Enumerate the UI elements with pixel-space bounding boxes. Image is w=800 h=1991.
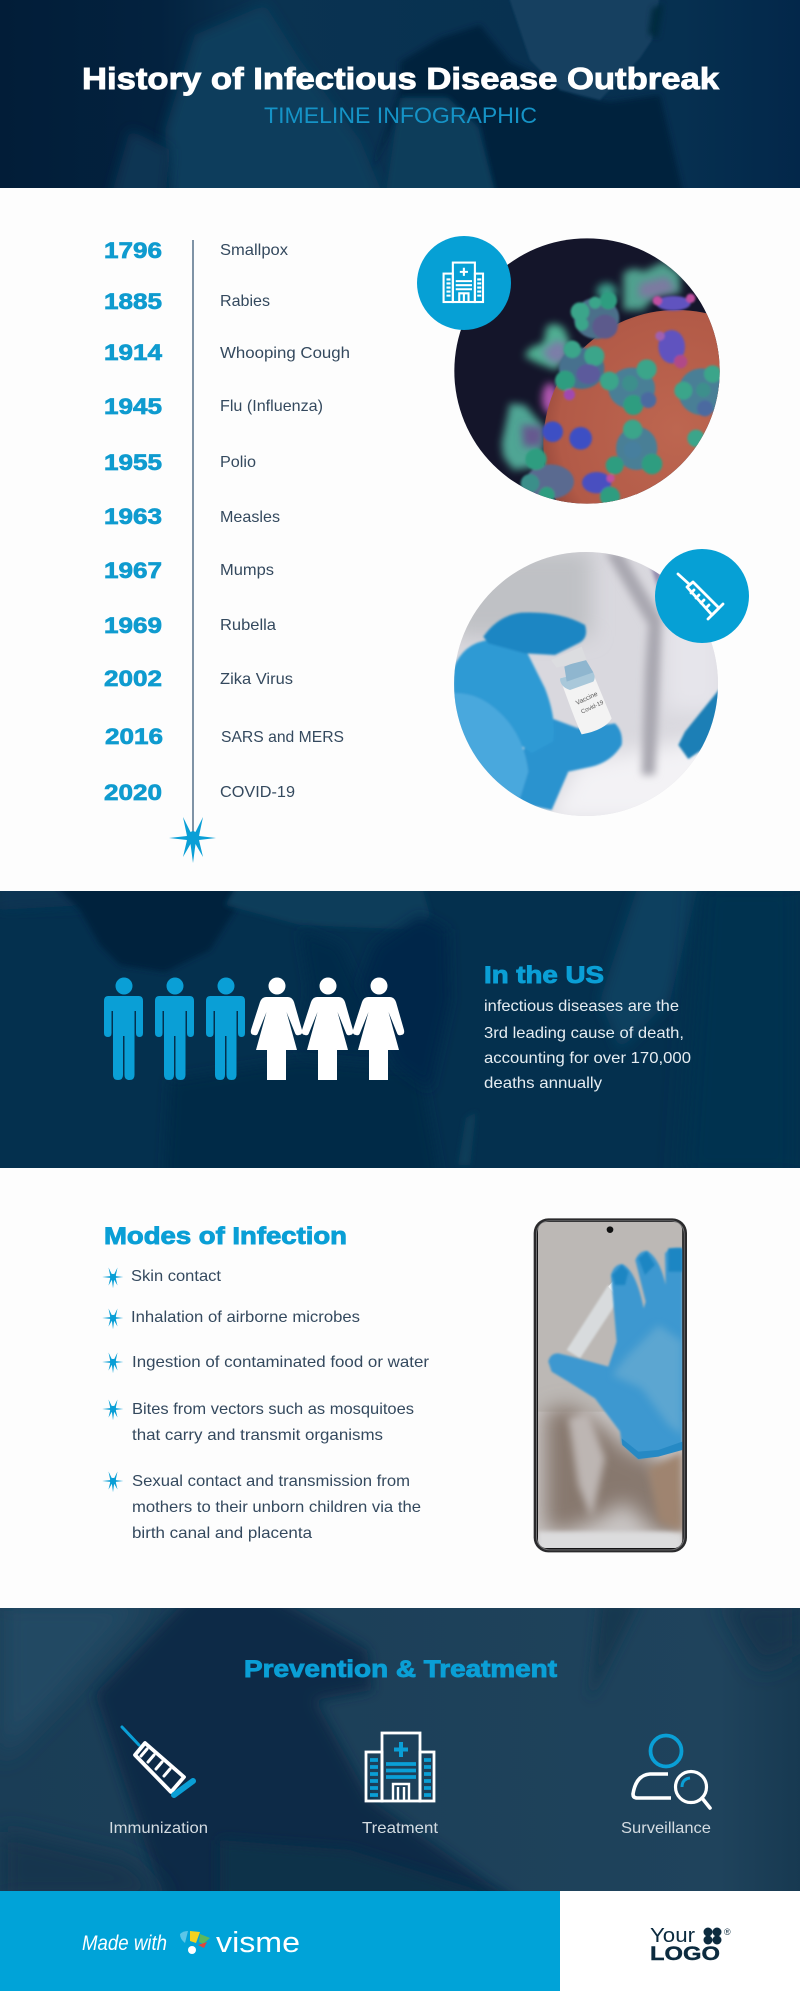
timeline years: 1963 — [104, 504, 162, 529]
bullet text 2: Inhalation of airborne microbes — [131, 1309, 360, 1326]
list: modes of infection — [102, 1268, 430, 1542]
US statistic text: accounting for over 170,000 — [484, 1050, 691, 1067]
timeline years: 1967 — [104, 558, 162, 583]
bullet star 5 — [102, 1472, 123, 1492]
bullet text 5 — [132, 1473, 421, 1542]
panel: your logo — [560, 1891, 800, 1991]
photo: gloved hand holding vaccine vial: Covid-19 — [580, 700, 605, 716]
blue patches — [542, 421, 563, 442]
timeline years — [104, 238, 163, 805]
icon: hospital badge — [417, 236, 511, 330]
timeline diseases: SARS and MERS — [221, 729, 344, 746]
timeline diseases — [220, 242, 350, 801]
visme wordmark: visme — [216, 1927, 300, 1959]
bullet text 1: Skin contact — [131, 1268, 222, 1285]
spike top — [574, 298, 619, 339]
heading: Modes of Infection: Modes of Infection — [104, 1223, 347, 1250]
timeline years: 1914 — [104, 340, 163, 365]
bullet text 4: that carry and transmit organisms — [132, 1427, 383, 1444]
US statistic text: 3rd leading cause of death, — [484, 1025, 684, 1042]
photo: coronavirus — [454, 238, 720, 504]
US statistic text — [484, 998, 691, 1092]
purple patches — [656, 296, 691, 311]
timeline diseases: Rubella — [220, 617, 276, 634]
bullet star 2 — [102, 1309, 123, 1329]
bullet star 1 — [102, 1268, 123, 1288]
label: Treatment: Treatment — [362, 1820, 439, 1837]
photo: gloved hand holding vaccine vial: Vaccine — [575, 691, 599, 707]
bullet star 4 — [102, 1400, 123, 1420]
US panel photo: vaccination — [0, 880, 800, 1180]
heading: In the US: In the US — [484, 962, 604, 989]
logo text: Your: Your — [650, 1925, 695, 1947]
timeline years: 1955 — [104, 450, 162, 475]
spike lower center — [616, 427, 657, 470]
prevention panel photo: fingers — [0, 1595, 800, 1905]
spike lower left — [526, 464, 574, 499]
photo: gloved hand holding vaccine vial — [452, 550, 722, 822]
timeline diseases: Zika Virus — [220, 671, 293, 688]
patch bottom — [582, 472, 611, 493]
subtitle: TIMELINE INFOGRAPHIC — [264, 103, 537, 128]
spike right — [678, 368, 725, 415]
timeline years: 1885 — [104, 289, 162, 314]
phone mockup with gloved hand photo — [534, 1218, 687, 1552]
spike center — [608, 368, 655, 409]
timeline diseases: Smallpox — [220, 242, 288, 259]
label: Immunization: Immunization — [109, 1820, 208, 1837]
bullet text 5: birth canal and placenta — [132, 1525, 312, 1542]
bullet star 3 — [102, 1353, 123, 1373]
panel: Modes of Infection — [102, 1218, 687, 1552]
bullet text 4: Bites from vectors such as mosquitoes — [132, 1401, 414, 1418]
bullet text 4 — [132, 1401, 414, 1444]
out of focus background spikes — [502, 262, 680, 470]
registered mark: ® — [724, 1927, 731, 1937]
panel: Prevention & Treatment — [0, 1595, 800, 1905]
timeline years: 2016 — [105, 724, 163, 749]
pictogram: three men, three women — [104, 978, 404, 1080]
logo clover mark — [704, 1928, 722, 1944]
timeline axis line — [192, 240, 194, 835]
timeline diseases: Rabies — [220, 293, 270, 310]
logo text: LOGO: LOGO — [650, 1944, 720, 1965]
timeline diseases: COVID-19 — [220, 784, 295, 801]
label: Surveillance: Surveillance — [621, 1820, 711, 1837]
timeline years: 1945 — [104, 394, 162, 419]
visme logo mark — [180, 1931, 210, 1954]
panel: timeline — [104, 236, 800, 863]
bullet text 5: mothers to their unborn children via the — [132, 1499, 421, 1516]
made with label: Made with — [82, 1932, 167, 1955]
timeline end star — [169, 817, 216, 863]
timeline years: 1969 — [104, 613, 162, 638]
women — [251, 978, 404, 1080]
US statistic text: infectious diseases are the — [484, 998, 679, 1015]
heading: Prevention & Treatment: Prevention & Treatment — [244, 1656, 557, 1683]
timeline diseases: Whooping Cough — [220, 345, 350, 362]
bullet text 3: Ingestion of contaminated food or water — [132, 1354, 430, 1371]
title: History of Infectious Disease Outbreak — [82, 61, 720, 96]
timeline diseases: Flu (Influenza) — [220, 398, 323, 415]
icon: syringe — [122, 1727, 193, 1795]
timeline diseases: Mumps — [220, 562, 274, 579]
timeline diseases: Measles — [220, 509, 280, 526]
panel: footer brand — [0, 1891, 560, 1991]
timeline diseases: Polio — [220, 454, 256, 471]
spike center left — [559, 348, 604, 389]
icon: surveillance — [633, 1736, 710, 1808]
timeline years: 1796 — [104, 238, 162, 263]
timeline years: 2002 — [104, 666, 162, 691]
timeline years: 2020 — [104, 780, 162, 805]
men — [104, 978, 245, 1080]
panel: In the US — [0, 880, 800, 1180]
bullet text 5: Sexual contact and transmission from — [132, 1473, 410, 1490]
icon: hospital — [366, 1733, 434, 1801]
US statistic text: deaths annually — [484, 1075, 602, 1092]
header photo: masked medical worker — [0, 0, 800, 200]
icon: syringe badge — [655, 549, 749, 643]
panel: header — [0, 0, 800, 200]
